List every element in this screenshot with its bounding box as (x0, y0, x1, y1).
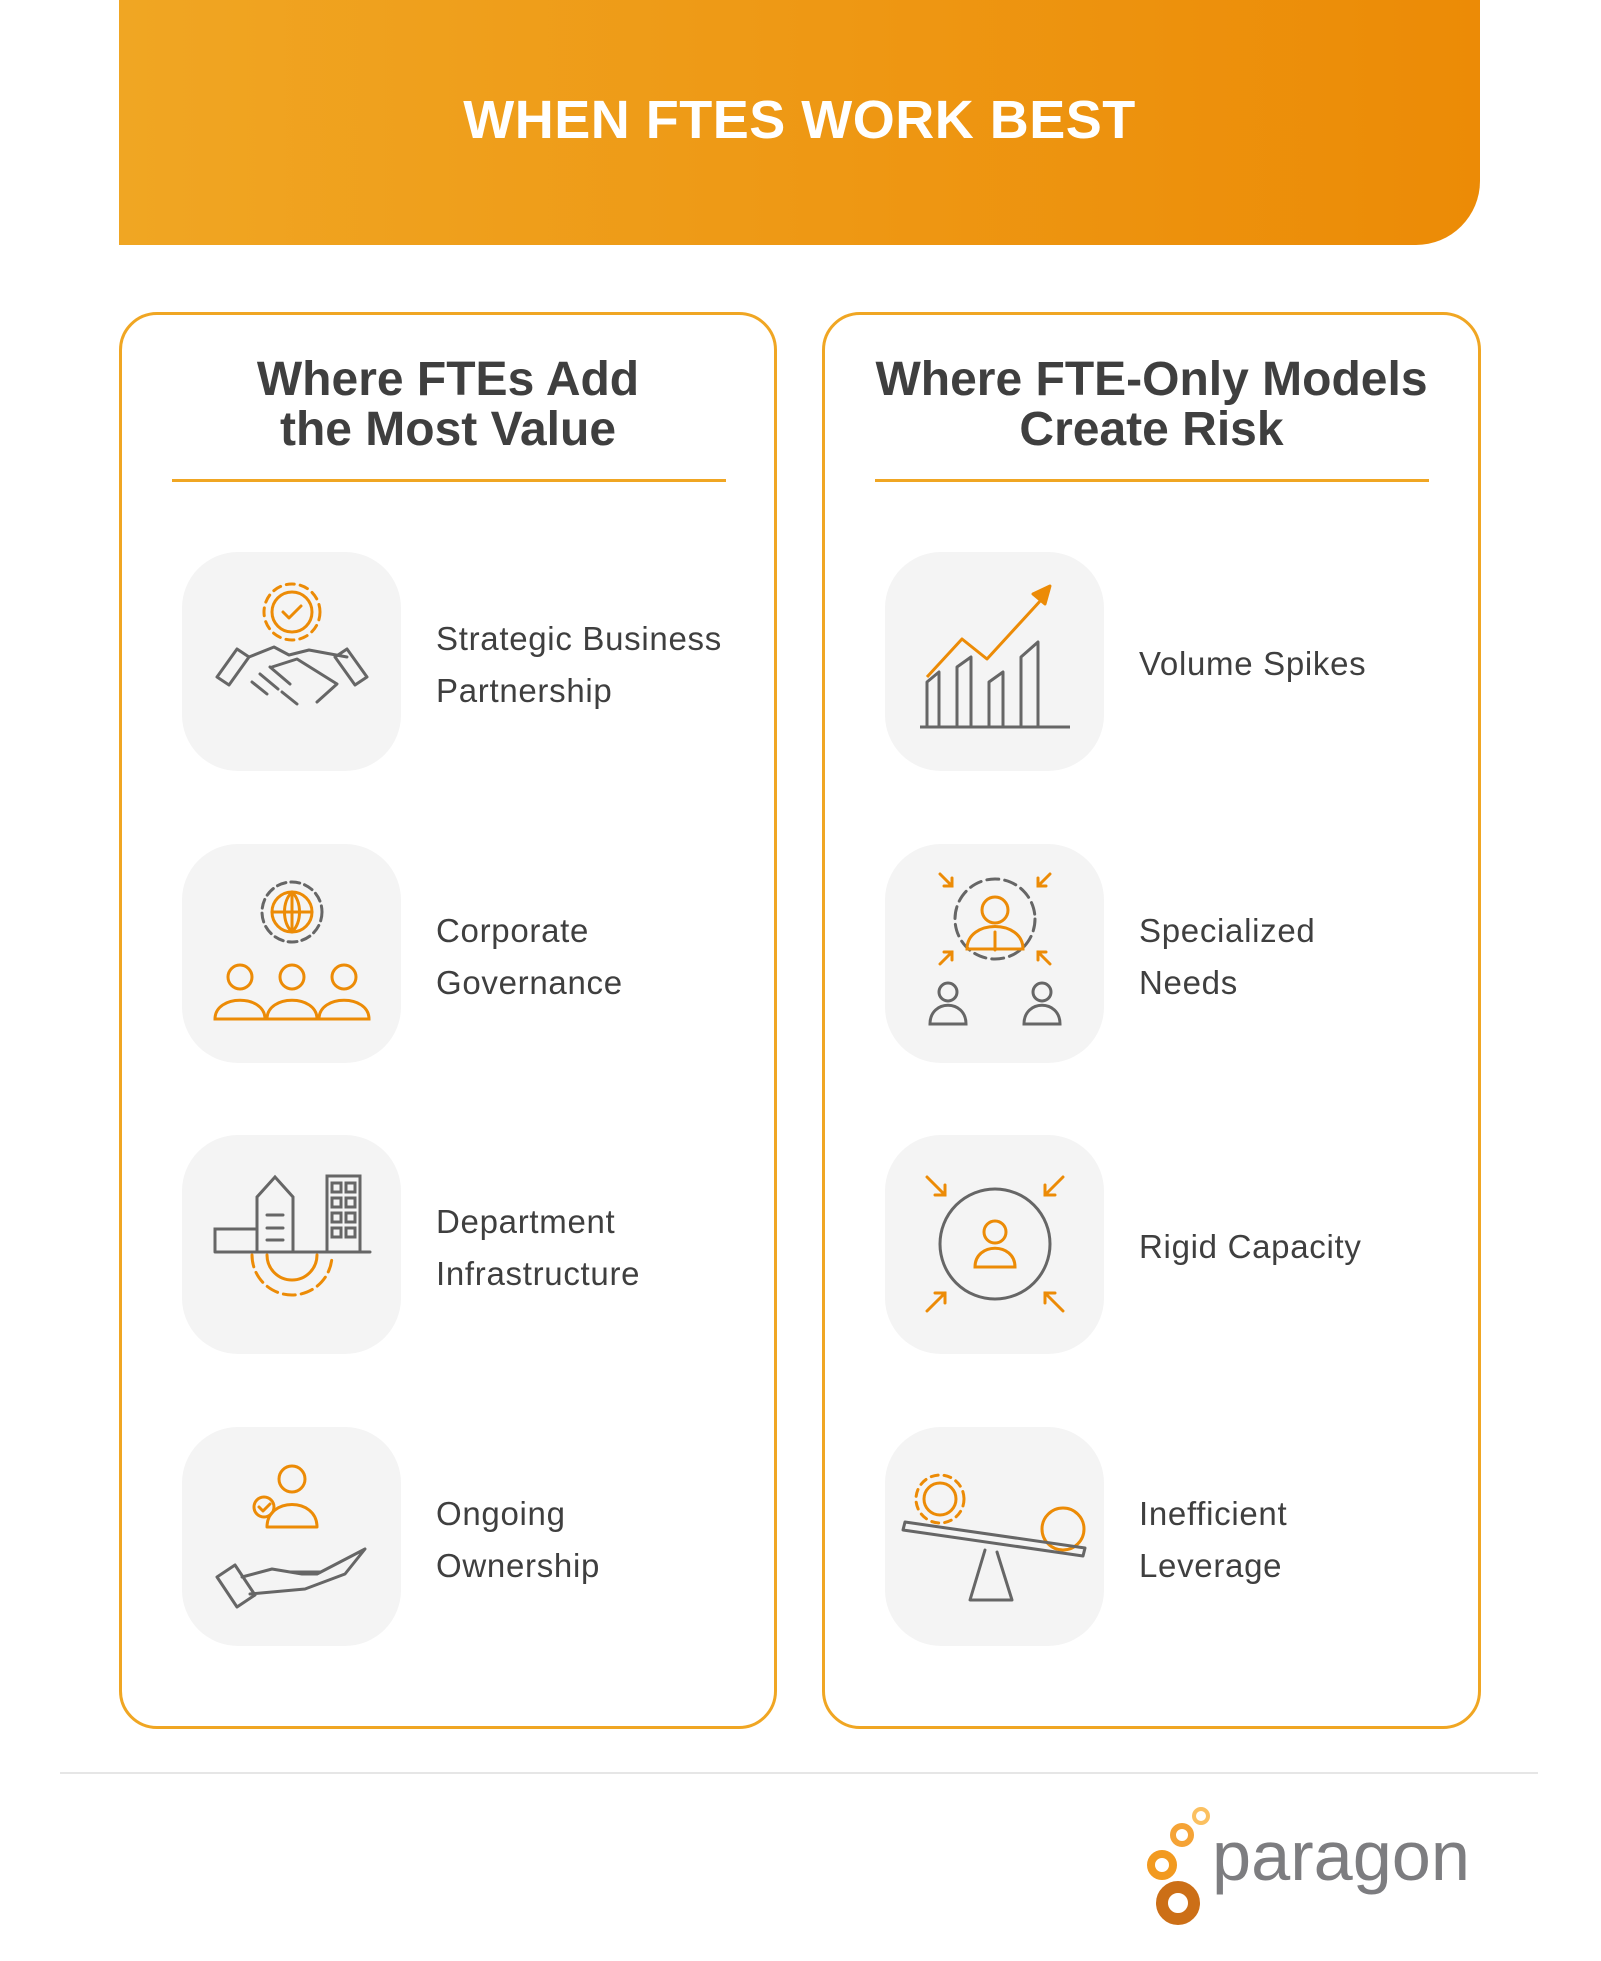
text: department infrastructure (436, 1203, 640, 1292)
text: inefficient leverage: Leverage (1139, 1547, 1282, 1584)
icon: inefficient leverage (885, 1427, 1104, 1646)
panel heading (875, 353, 1428, 456)
text: inefficient leverage (1139, 1495, 1287, 1584)
icon: department infrastructure (182, 1135, 401, 1354)
panel heading: Create Risk (1019, 403, 1284, 456)
text: strategic business partnership: Strategic Business (436, 620, 722, 657)
text: rigid capacity: Rigid Capacity (1139, 1228, 1362, 1265)
icon: handshake with gear (182, 552, 401, 771)
text: ongoing ownership: Ownership (436, 1547, 600, 1584)
text: ongoing ownership: Ongoing (436, 1495, 566, 1532)
text: volume spikes: Volume Spikes (1139, 645, 1366, 682)
text: department infrastructure: Department (436, 1203, 615, 1240)
panel heading (256, 353, 639, 456)
text: department infrastructure: Infrastructure (436, 1255, 640, 1292)
icon: ongoing ownership (182, 1427, 401, 1646)
logo: paragon (1147, 1807, 1470, 1925)
panel: where FTE-only models create risk (822, 312, 1481, 1729)
header band (119, 0, 1480, 245)
logo: paragon: paragon (1212, 1817, 1470, 1895)
panel heading: Where FTE-Only Models (875, 353, 1428, 406)
text: ongoing ownership (436, 1495, 600, 1584)
text: corporate governance: Governance (436, 964, 623, 1001)
icon: rigid capacity (885, 1135, 1104, 1354)
text: strategic business partnership: Partnership (436, 672, 612, 709)
text: inefficient leverage: Inefficient (1139, 1495, 1287, 1532)
panel: where FTEs add most value (119, 312, 777, 1729)
icon: governance (182, 844, 401, 1063)
text: specialized needs: Specialized (1139, 912, 1315, 949)
title: WHEN FTES WORK BEST (463, 90, 1136, 150)
icon: specialized needs (885, 844, 1104, 1063)
text: corporate governance (436, 912, 623, 1001)
panel heading: the Most Value (280, 403, 616, 456)
text: specialized needs (1139, 912, 1315, 1001)
text: corporate governance: Corporate (436, 912, 589, 949)
text: strategic business partnership (436, 620, 722, 709)
text: specialized needs: Needs (1139, 964, 1238, 1001)
icon: volume spikes (885, 552, 1104, 771)
panel heading: Where FTEs Add (257, 353, 639, 406)
